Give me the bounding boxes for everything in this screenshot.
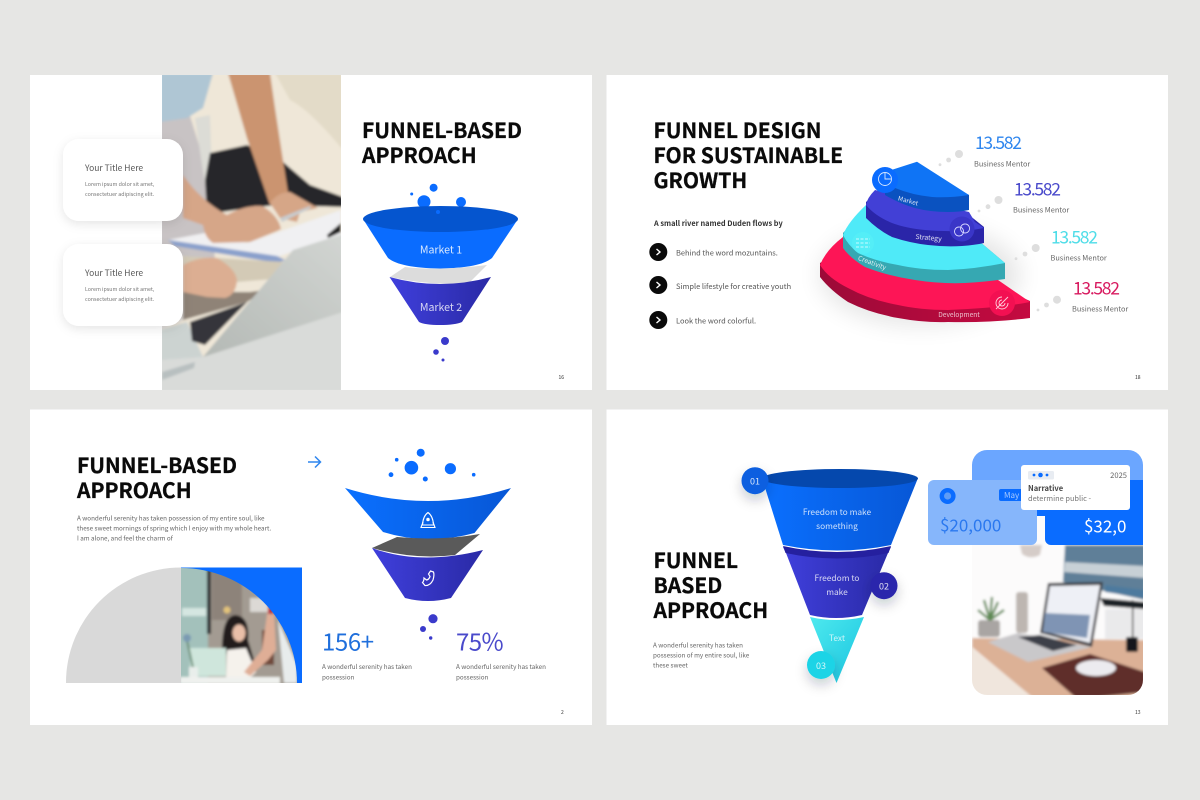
funnel: three stages: something bbox=[816, 520, 858, 532]
body text: I am alone, and feel the charm of bbox=[77, 534, 174, 542]
card: your title here 2: Lorem ipsum dolor sit amet, bbox=[85, 285, 155, 293]
badge 03 bbox=[807, 651, 835, 679]
title: GROWTH bbox=[654, 165, 747, 195]
stat: market 13.582: 13.582 bbox=[975, 130, 1021, 155]
layer: creativity bbox=[843, 205, 1005, 283]
title: FUNNEL-BASED bbox=[77, 450, 237, 480]
stat: development 13.582: 13.582 bbox=[1073, 276, 1119, 300]
funnel: market 1 and market 2: Market 1 bbox=[420, 242, 462, 258]
funnel: three stages bbox=[742, 467, 918, 683]
layer: strategy bbox=[866, 190, 984, 246]
stat: strategy 13.582: 13.582 bbox=[1014, 176, 1060, 202]
card: your title here 2: Your Title Here bbox=[84, 267, 143, 279]
title: FUNNEL bbox=[654, 545, 738, 575]
badge 01: 01 bbox=[750, 474, 760, 488]
body text: possession of my entire soul, like bbox=[653, 650, 750, 660]
stat: 156+ bbox=[322, 622, 412, 682]
page number: 2 bbox=[561, 709, 564, 716]
card: your title here 1: consectetuer adipiscing elit. bbox=[85, 190, 155, 198]
layer: development: Development bbox=[938, 309, 980, 319]
stat: 75%: A wonderful serenity has taken bbox=[456, 662, 546, 671]
photo block: semicircle and woman bbox=[66, 564, 303, 686]
layer: development bbox=[820, 237, 1030, 322]
title: FUNNEL DESIGN bbox=[654, 115, 822, 145]
title: APPROACH bbox=[76, 475, 192, 505]
panel: slide 13 funnel based approach with dashboard photo bbox=[606, 410, 1168, 725]
stat: 156+: possession bbox=[322, 672, 355, 682]
stat: development 13.582 bbox=[1037, 276, 1128, 314]
stat: 75% bbox=[456, 622, 546, 682]
card: $20,000 bbox=[928, 480, 1037, 545]
stat: development 13.582: Business Mentor bbox=[1072, 304, 1128, 314]
funnel: three stages: Freedom to bbox=[815, 572, 859, 584]
card: your title here 2: consectetuer adipiscing elit. bbox=[85, 295, 155, 303]
photo: desk with laptop bbox=[972, 544, 1143, 695]
photo: people working at laptop bbox=[160, 73, 343, 392]
body text: A wonderful serenity has taken possession of my entire soul, like bbox=[77, 514, 265, 522]
dashboard background cards bbox=[972, 450, 1143, 545]
card: $20,000: May bbox=[1004, 490, 1020, 501]
badge 02: 02 bbox=[879, 580, 889, 592]
chart: stacked 3d funnel layers bbox=[820, 162, 1030, 325]
funnel: three stages: Freedom to make bbox=[803, 506, 872, 518]
icon: rocket bbox=[421, 512, 435, 528]
page number: 16 bbox=[558, 374, 564, 381]
card: $20,000: $20,000 bbox=[940, 512, 1001, 536]
panel: slide 2 funnel-based approach with stats bbox=[30, 410, 592, 725]
funnel: three stages: Text bbox=[829, 632, 846, 644]
icon: phone bbox=[422, 571, 434, 586]
badge 02 bbox=[870, 572, 898, 599]
layer: market: Market bbox=[897, 194, 920, 208]
body text: these sweet mornings of spring which I enjoy with my whole heart. bbox=[77, 524, 271, 532]
layer: market bbox=[872, 162, 969, 212]
card: narrative: Narrative bbox=[1028, 483, 1064, 494]
body text: A wonderful serenity has taken bbox=[653, 640, 743, 650]
bullet list: Simple lifestyle for creative youth bbox=[676, 281, 791, 292]
stat: creativity 13.582: 13.582 bbox=[1051, 224, 1097, 250]
badge 01 bbox=[742, 467, 768, 494]
arrow bbox=[308, 456, 320, 468]
stat: market 13.582 bbox=[939, 130, 1030, 170]
bullet list: Look the word colorful. bbox=[676, 316, 756, 326]
page number: 18 bbox=[1135, 374, 1141, 381]
title: FUNNEL-BASED bbox=[362, 115, 522, 145]
layer: creativity: Creativity bbox=[857, 252, 888, 272]
stat: creativity 13.582 bbox=[1015, 224, 1107, 264]
stat: market 13.582: Business Mentor bbox=[974, 158, 1030, 170]
funnel: three stages: make bbox=[826, 586, 848, 598]
badge 03: 03 bbox=[816, 659, 826, 672]
card: your title here 2 bbox=[63, 244, 183, 326]
title: APPROACH bbox=[361, 140, 477, 170]
stat: strategy 13.582 bbox=[978, 176, 1069, 216]
funnel: rocket and phone bbox=[345, 449, 511, 640]
dashboard background cards: $32,0 bbox=[1084, 512, 1126, 538]
stat: 156+: 156+ bbox=[322, 622, 374, 658]
body text: these sweet bbox=[653, 660, 688, 670]
page number: 13 bbox=[1135, 709, 1141, 716]
card: narrative bbox=[1021, 465, 1130, 510]
card: your title here 1: Lorem ipsum dolor sit amet, bbox=[85, 180, 155, 188]
panel: slide 16 funnel-based approach with photo bbox=[30, 73, 592, 392]
card: narrative: 2025 bbox=[1110, 470, 1127, 481]
stat: 75%: 75% bbox=[456, 622, 503, 658]
funnel: market 1 and market 2 bbox=[363, 184, 518, 362]
bullet list: Behind the word mozuntains. bbox=[676, 248, 778, 258]
title: APPROACH bbox=[652, 595, 768, 625]
stat: 156+: A wonderful serenity has taken bbox=[322, 662, 412, 671]
panel: slide 18 funnel design bbox=[606, 75, 1168, 390]
card: your title here 1: Your Title Here bbox=[84, 162, 143, 174]
stat: 75%: possession bbox=[456, 672, 489, 682]
layer: strategy: Strategy bbox=[915, 231, 943, 243]
card: narrative: determine public - bbox=[1028, 493, 1092, 504]
bullet list bbox=[649, 243, 791, 329]
funnel: market 1 and market 2: Market 2 bbox=[420, 300, 462, 315]
stat: creativity 13.582: Business Mentor bbox=[1050, 252, 1107, 264]
title: FOR SUSTAINABLE bbox=[654, 140, 843, 170]
card: your title here 1 bbox=[63, 139, 183, 221]
subheading: A small river named Duden flows by bbox=[653, 218, 783, 229]
title: BASED bbox=[654, 570, 722, 600]
stat: strategy 13.582: Business Mentor bbox=[1013, 204, 1069, 216]
